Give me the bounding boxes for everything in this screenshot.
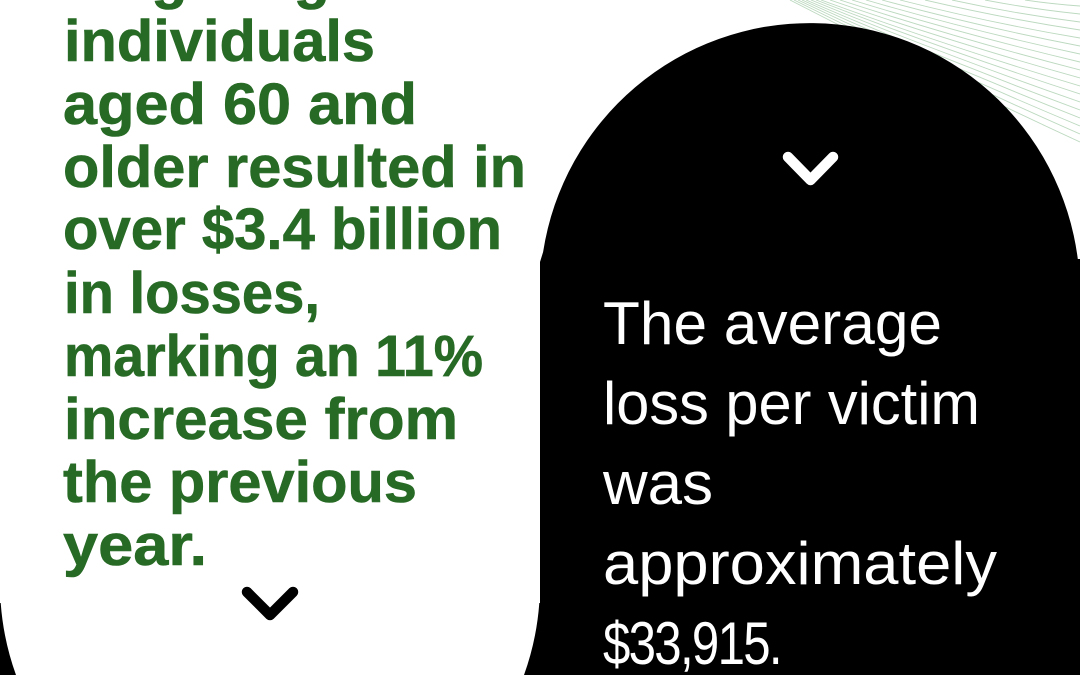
text: losses statement: older resulted in <box>63 135 526 200</box>
text: average loss per victim: approximately <box>603 530 997 597</box>
text: losses statement: individuals <box>64 9 375 74</box>
text: losses statement: year. <box>63 513 207 578</box>
text: losses statement: over $3.4 billion <box>63 197 502 262</box>
panel: white arch with black lower corners <box>0 592 540 675</box>
panel: black arch <box>540 23 1080 675</box>
text: losses statement <box>63 0 526 578</box>
text: losses statement: in losses, <box>64 261 320 326</box>
text: losses statement: increase from <box>64 387 458 452</box>
text: losses statement: the previous <box>63 450 417 515</box>
text: average loss per victim: loss per victim <box>603 370 980 437</box>
text: average loss per victim: was <box>602 450 713 517</box>
text: losses statement: aged 60 and <box>63 72 417 137</box>
text: average loss per victim: The average <box>603 290 942 357</box>
icon: black chevron <box>247 592 293 615</box>
icon: white chevron <box>788 157 833 180</box>
text: losses statement: marking an 11% <box>64 324 483 389</box>
text: average loss per victim <box>602 290 997 675</box>
